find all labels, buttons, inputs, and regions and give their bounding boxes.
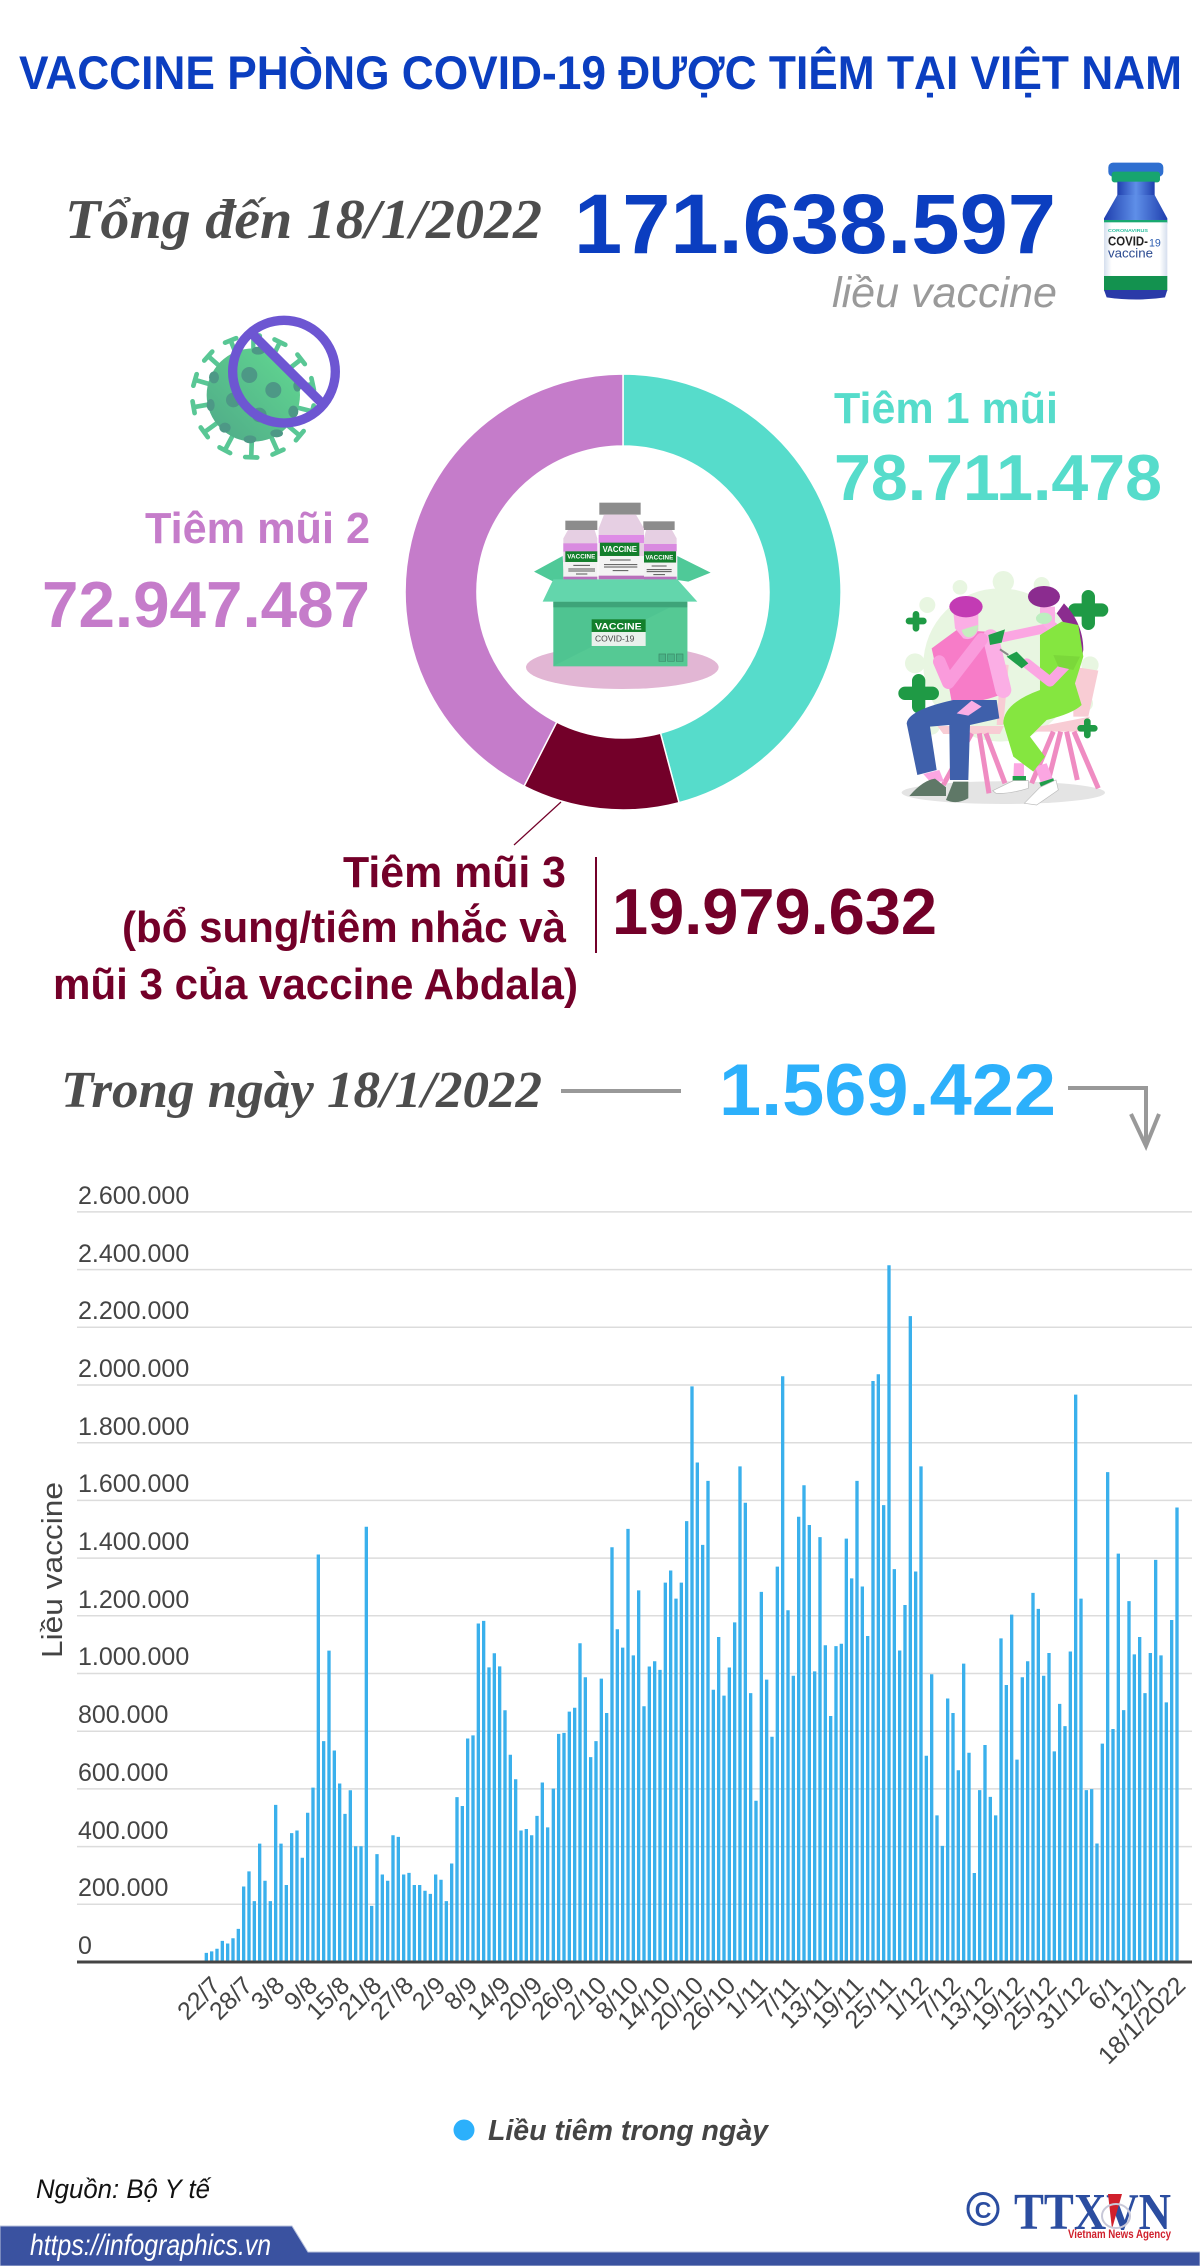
donut chart — [405, 374, 841, 810]
x axis labels — [172, 1971, 1191, 2070]
x axis labels: 22/7 — [172, 1971, 226, 2026]
y axis labels: 0 — [78, 1932, 92, 1960]
dash: daily connector — [561, 1089, 681, 1093]
x axis labels: 25/12 — [998, 1971, 1062, 2035]
box label: COVID-19 — [595, 635, 635, 644]
logo: TTXVN: Vietnam News Agency — [1068, 2227, 1171, 2241]
prohibition sign — [233, 320, 335, 423]
y axis labels: 800.000 — [78, 1701, 168, 1729]
virus body — [207, 348, 300, 442]
ground shadow — [902, 781, 1105, 804]
unit label: liều vaccine — [832, 269, 1057, 317]
chair: nurse — [1030, 667, 1098, 788]
divider: tiêm mũi 3 — [595, 857, 597, 953]
bars: jul to sep — [206, 1527, 548, 1962]
x axis labels: 2/10 — [558, 1971, 612, 2026]
source: Nguồn: Bộ Y tế — [36, 2174, 212, 2204]
footer band — [0, 2226, 1200, 2266]
footer band: https://infographics.vn — [30, 2229, 271, 2262]
y axis labels: 1.800.000 — [78, 1413, 189, 1441]
leader line — [514, 802, 561, 845]
x axis labels: 13/12 — [934, 1971, 998, 2035]
x axis labels: 31/12 — [1031, 1971, 1095, 2035]
daily number: 1.569.422 — [719, 1050, 1056, 1131]
segment: tiêm mũi 3 — [524, 722, 679, 810]
x axis labels: 2/9 — [407, 1971, 451, 2016]
value: tiêm 1 mũi: 78.711.478 — [834, 441, 1162, 514]
icon: virus prohibited — [193, 320, 335, 457]
x axis labels: 20/9 — [494, 1971, 548, 2026]
patient — [907, 596, 1003, 802]
bar chart — [37, 1182, 1192, 2070]
x axis labels: 3/8 — [246, 1971, 290, 2016]
plus signs: large — [905, 597, 1102, 707]
box body — [553, 602, 687, 666]
virus spots — [207, 347, 301, 443]
y axis labels: 400.000 — [78, 1817, 168, 1845]
label: tiêm mũi 3: (bổ sung/tiêm nhắc và — [122, 902, 567, 952]
icon: vaccine vial: 19 — [1149, 238, 1161, 250]
box icons — [659, 654, 683, 661]
x axis labels: 1/11 — [720, 1971, 773, 2024]
y axis title: Liều vaccine — [37, 1482, 69, 1658]
y axis labels — [78, 1182, 189, 1960]
segment: tiêm mũi 2 — [405, 374, 623, 786]
x axis labels: 21/8 — [333, 1971, 387, 2026]
x axis labels: 7/11 — [752, 1971, 805, 2024]
chart legend: Liều tiêm trong ngày — [488, 2115, 770, 2147]
label: tiêm mũi 3 — [53, 848, 578, 1009]
label: tiêm 1 mũi: Tiêm 1 mũi — [834, 384, 1058, 433]
value: tiêm mũi 2: 72.947.487 — [42, 568, 370, 641]
vial: right: VACCINE — [645, 555, 673, 562]
label: tiêm mũi 2: Tiêm mũi 2 — [145, 504, 370, 553]
y axis labels: 2.200.000 — [78, 1297, 189, 1325]
arrow: to chart — [1068, 1088, 1159, 1146]
y axis labels: 2.400.000 — [78, 1240, 189, 1268]
box flaps — [534, 556, 564, 582]
vial: center — [599, 503, 644, 579]
chair: patient — [937, 664, 1009, 793]
x axis labels: 7/12 — [912, 1971, 966, 2026]
y axis labels: 2.600.000 — [78, 1182, 189, 1210]
box label — [592, 619, 646, 646]
y axis labels: 1.400.000 — [78, 1528, 189, 1556]
x axis labels: 19/12 — [966, 1971, 1030, 2035]
x axis labels: 8/10 — [590, 1971, 644, 2026]
vial: left — [563, 521, 597, 580]
value: tiêm mũi 3: 19.979.632 — [612, 875, 937, 948]
vial: center: VACCINE — [603, 545, 638, 554]
x axis labels: 18/1/2022 — [1093, 1971, 1191, 2070]
icon: vaccine vial: COVID- — [1108, 234, 1148, 248]
total number: 171.638.597 — [574, 177, 1056, 271]
logo: TTXVN: C — [975, 2197, 991, 2223]
logo: TTXVN: TTXVN — [1014, 2184, 1171, 2241]
x axis labels: 14/10 — [612, 1971, 676, 2035]
grid lines — [77, 1212, 1192, 1904]
icon: vaccine vial — [1104, 163, 1167, 299]
x axis labels: 13/11 — [775, 1971, 837, 2034]
box label: VACCINE — [595, 621, 642, 631]
virus spikes — [193, 336, 314, 457]
x axis labels: 6/1 — [1083, 1971, 1127, 2016]
y axis labels: 2.000.000 — [78, 1355, 189, 1383]
x axis labels: 20/10 — [645, 1971, 709, 2035]
x axis labels: 25/11 — [840, 1971, 902, 2034]
heading: total date: Tổng đến 18/1/2022 — [65, 189, 542, 251]
x axis labels: 27/8 — [365, 1971, 419, 2026]
vial: left: VACCINE — [567, 555, 595, 561]
segment: tiêm 1 mũi — [623, 374, 841, 803]
y axis labels: 1.200.000 — [78, 1586, 189, 1614]
heading: daily date: Trong ngày 18/1/2022 — [61, 1062, 542, 1119]
label: tiêm mũi 3: Tiêm mũi 3 — [343, 848, 566, 897]
x axis labels: 14/9 — [462, 1971, 516, 2026]
x axis line — [77, 1960, 1192, 1964]
label: tiêm mũi 3: mũi 3 của vaccine Abdala) — [53, 960, 578, 1009]
y axis labels: 1.600.000 — [78, 1470, 189, 1498]
x axis labels: 26/9 — [526, 1971, 580, 2026]
y axis labels: 200.000 — [78, 1874, 168, 1902]
x axis labels: 8/9 — [439, 1971, 483, 2016]
virus backdrop — [905, 571, 1099, 742]
x axis labels: 28/7 — [204, 1971, 258, 2026]
vial: right — [643, 521, 677, 580]
icon: vaccine vial: vaccine — [1108, 246, 1153, 260]
y axis labels: 600.000 — [78, 1759, 168, 1787]
logo: TTXVN — [968, 2184, 1171, 2241]
x axis labels: 26/10 — [677, 1971, 741, 2035]
x axis labels: 15/8 — [301, 1971, 355, 2026]
icon: vaccine vial: CORONAVIRUS — [1108, 228, 1149, 234]
bars: sep to nov — [553, 1376, 841, 1962]
y axis labels: 1.000.000 — [78, 1643, 189, 1671]
bars: nov to jan — [846, 1265, 1177, 1962]
plus signs: small — [909, 614, 1094, 735]
x axis labels: 19/11 — [807, 1971, 869, 2034]
illustration: vaccination scene — [902, 571, 1105, 805]
x axis labels: 1/12 — [880, 1971, 934, 2026]
x axis labels: 12/1 — [1105, 1971, 1159, 2026]
x axis labels: 9/8 — [279, 1971, 323, 2016]
nurse — [988, 586, 1083, 805]
icon: vaccine box — [526, 503, 719, 689]
